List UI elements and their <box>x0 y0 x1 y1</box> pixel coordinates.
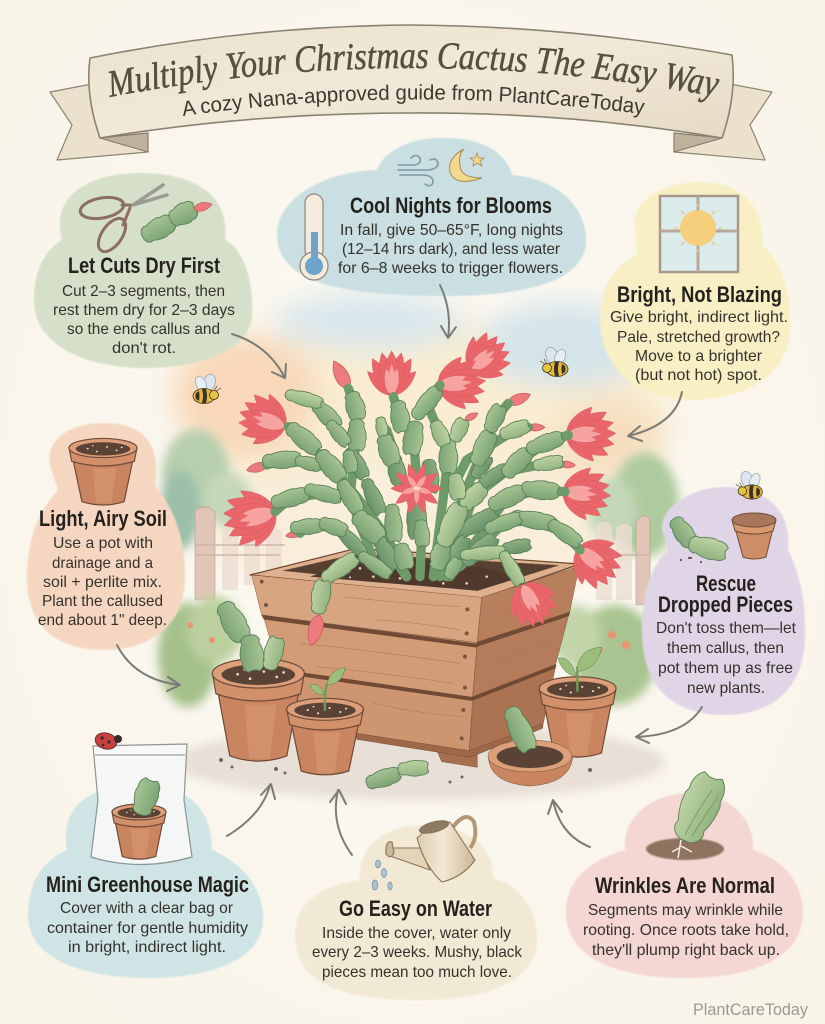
watermark: PlantCareToday <box>693 1000 808 1019</box>
icon: dropped cuttings <box>666 513 730 563</box>
heading: wrinkles are normal: Wrinkles Are Normal <box>595 873 775 898</box>
subtitle: A cozy Nana-approved guide from PlantCareToday <box>183 84 645 118</box>
arrow: rescue to pot <box>636 707 702 743</box>
planter and cactus scene <box>212 320 635 792</box>
terracotta pot with seedling <box>287 667 363 775</box>
body: mini greenhouse <box>47 900 248 956</box>
banner folds <box>100 133 722 152</box>
icon: pot of soil <box>69 438 137 505</box>
heading: rescue dropped pieces: Rescue <box>696 571 756 596</box>
heading: mini greenhouse: Mini Greenhouse Magic <box>46 872 249 897</box>
body: let cuts dry: so the ends callus and <box>67 321 220 338</box>
icon: clear bag <box>91 744 192 864</box>
body: cool nights: In fall, give 50–65°F, long nights <box>340 222 563 239</box>
icon: sunny window <box>660 196 738 272</box>
heading: let cuts dry: Let Cuts Dry First <box>68 253 221 278</box>
body: rescue dropped pieces: new plants. <box>687 680 765 697</box>
main stems <box>262 383 585 582</box>
arrow: greenhouse to pot <box>227 784 275 836</box>
ground <box>175 724 665 800</box>
wooden crate planter <box>250 548 580 767</box>
body: light airy soil: Plant the callused <box>42 593 163 610</box>
icon: wind <box>398 156 438 186</box>
flowers and buds behind stems <box>215 320 635 602</box>
panel: light airy soil <box>27 423 185 650</box>
panel: go easy on water <box>295 817 537 1000</box>
panel: cool nights <box>277 138 586 296</box>
body: rescue dropped pieces: pot them up as free <box>658 660 793 677</box>
body: wrinkles are normal <box>583 902 789 959</box>
body: light airy soil: soil + perlite mix. <box>43 574 162 591</box>
icon: cactus cuttings <box>138 198 213 246</box>
banner right tail <box>674 84 772 160</box>
icon: ladybug <box>93 730 122 752</box>
body: rescue dropped pieces <box>656 620 797 697</box>
icon: empty pot <box>732 513 776 559</box>
open front flowers <box>304 462 568 648</box>
heading: cool nights: Cool Nights for Blooms <box>350 193 552 218</box>
icon: thermometer <box>300 194 328 280</box>
branch backbones <box>267 385 580 577</box>
body: mini greenhouse: Cover with a clear bag or <box>60 900 234 917</box>
body: light airy soil: Use a pot with <box>53 535 153 552</box>
heading: rescue dropped pieces <box>658 571 793 617</box>
terracotta pot left with cactus <box>212 597 304 761</box>
fallen cactus segment <box>364 760 429 792</box>
panel: rescue dropped pieces <box>642 470 805 715</box>
icon: bee <box>736 470 762 499</box>
back stems <box>330 444 532 574</box>
arrow: wrinkles to saucer <box>548 800 590 847</box>
cactus plant <box>215 320 635 648</box>
body: light airy soil: drainage and a <box>52 555 153 572</box>
banner body <box>89 25 733 138</box>
icon: water drops <box>372 860 392 890</box>
icon: wrinkled cutting in soil <box>646 768 731 860</box>
arrow: bright to plant <box>628 392 682 441</box>
body: mini greenhouse: in bright, indirect light. <box>68 939 226 956</box>
body: bright not blazing <box>610 309 788 384</box>
body: go easy on water: Inside the cover, water only <box>322 925 511 942</box>
heading: bright not blazing: Bright, Not Blazing <box>617 282 782 307</box>
body: go easy on water: every 2–3 weeks. Mushy, black <box>312 944 523 961</box>
body: bright not blazing: Move to a brighter <box>635 348 763 365</box>
bee right <box>540 345 568 376</box>
icon: watering can <box>386 817 475 882</box>
body: light airy soil: end about 1" deep. <box>38 612 167 629</box>
body: let cuts dry: don't rot. <box>112 340 176 357</box>
terracotta pot right with seedling <box>539 647 616 757</box>
heading: rescue dropped pieces: Dropped Pieces <box>658 592 793 617</box>
icon: scissors <box>79 185 167 256</box>
panel: bright not blazing <box>600 182 790 400</box>
body: wrinkles are normal: they'll plump right back up. <box>592 942 780 959</box>
banner <box>49 24 773 161</box>
body: let cuts dry: Cut 2–3 segments, then <box>62 283 225 300</box>
garden scene background wash <box>158 294 679 800</box>
body: bright not blazing: Give bright, indirect light. <box>610 309 788 326</box>
body: let cuts dry: rest them dry for 2–3 days <box>53 302 235 319</box>
background fence <box>195 507 650 605</box>
background shrubs <box>158 596 657 707</box>
soil mound <box>310 560 517 591</box>
body: wrinkles are normal: rooting. Once roots take hold, <box>583 922 789 939</box>
body: bright not blazing: (but not hot) spot. <box>635 367 762 384</box>
arrow: cool nights to plant <box>440 285 456 338</box>
body: let cuts dry <box>53 283 235 357</box>
saucer pot with cutting <box>488 703 573 786</box>
title: Multiply Your Christmas Cactus The Easy Way <box>108 43 720 102</box>
body: go easy on water <box>312 925 523 981</box>
arrow: soil to pot <box>117 645 180 691</box>
arrow: dry to plant <box>232 334 286 378</box>
body: rescue dropped pieces: them callus, then <box>667 640 784 657</box>
body: bright not blazing: Pale, stretched growth? <box>617 329 780 346</box>
panel: wrinkles are normal <box>566 768 803 978</box>
panel: mini greenhouse <box>28 730 263 978</box>
panel: let cuts dry <box>34 173 252 368</box>
body: go easy on water: pieces mean too much love. <box>322 964 512 981</box>
heading: go easy on water: Go Easy on Water <box>339 896 492 921</box>
body: cool nights <box>338 222 563 277</box>
arrow: water to pot <box>330 790 352 855</box>
heading: light airy soil: Light, Airy Soil <box>39 506 167 531</box>
body: rescue dropped pieces: Don't toss them—let <box>656 620 797 637</box>
background trees <box>160 429 679 557</box>
body: mini greenhouse: container for gentle humidity <box>47 920 248 937</box>
body: light airy soil <box>38 535 167 629</box>
front light stems <box>284 387 565 615</box>
banner left tail <box>50 84 148 160</box>
body: wrinkles are normal: Segments may wrinkle while <box>588 902 783 919</box>
body: cool nights: (12–14 hrs dark), and less water <box>342 241 561 258</box>
icon: moon and star <box>450 149 484 181</box>
body: cool nights: for 6–8 weeks to trigger flowers. <box>338 260 563 277</box>
bee left <box>193 372 221 404</box>
